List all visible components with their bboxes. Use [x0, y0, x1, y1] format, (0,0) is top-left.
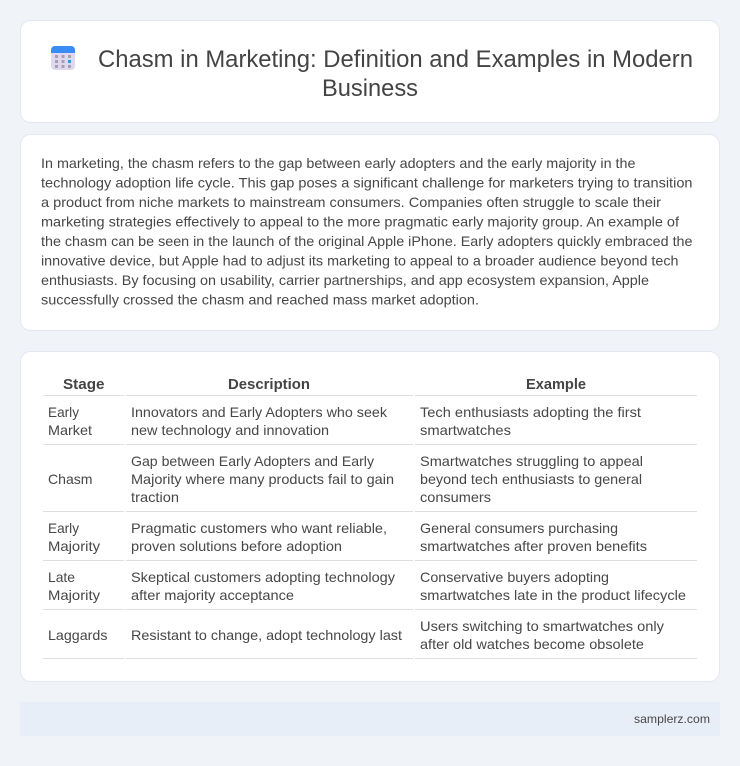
table row: Laggards: Laggards [48, 627, 108, 643]
panel: adoption stages table [20, 352, 720, 682]
table row: Chasm [48, 453, 643, 505]
table row: Late Majority [48, 569, 686, 603]
table row: Laggards: Resistant to change, adopt technology last [131, 627, 402, 643]
table header: Example [526, 376, 586, 393]
footer bar [20, 702, 720, 736]
table row: Early Majority [48, 520, 647, 554]
icon: calendar [51, 46, 75, 70]
table row: Laggards [48, 618, 664, 652]
table row: Late Majority: after majority acceptance [131, 587, 294, 603]
panel: title card [20, 20, 720, 122]
table row: Early Market: Market [48, 422, 92, 438]
table row: Late Majority: Late [48, 569, 75, 585]
table row: Chasm: Gap between Early Adopters and Early [131, 453, 374, 469]
table row: Early Majority: Pragmatic customers who want reliable, [131, 520, 387, 536]
table row: Early Majority: Majority [48, 538, 100, 554]
table row: Early Majority: General consumers purchasing [420, 520, 618, 536]
table header: Description [228, 376, 310, 393]
table row: Chasm: Chasm [48, 471, 92, 487]
text block: definition paragraph [41, 155, 693, 308]
text block: definition paragraph: technology adoption life cycle. This gap poses a significant challenge for marketers trying to transition [41, 174, 692, 190]
table row: Laggards: after old watches become obsolete [420, 636, 644, 652]
table row: Chasm: beyond tech enthusiasts to general [420, 471, 642, 487]
table row: Early Market: new technology and innovation [131, 422, 329, 438]
panel: definition text [20, 134, 720, 330]
text block: definition paragraph: innovative device, but Apple had to adjust its marketing to appeal to a broader audience beyond tech [41, 252, 678, 268]
text block: definition paragraph: In marketing, the chasm refers to the gap between early adopters and the early majority in the [41, 155, 636, 171]
table row: Early Majority: proven solutions before adoption [131, 538, 342, 554]
table row: Late Majority: Skeptical customers adopting technology [131, 569, 395, 585]
table row: Chasm: traction [131, 489, 179, 505]
table row: Early Market: Tech enthusiasts adopting the first [420, 404, 641, 420]
table row: Late Majority: Conservative buyers adopting [420, 569, 609, 585]
table row: Chasm: Majority where many products fail to gain [131, 471, 394, 487]
text block: definition paragraph: the chasm can be seen in the launch of the original Apple iPhone. Early adopters quickly embraced the [41, 233, 693, 249]
footer source text: samplerz.com [634, 712, 710, 726]
title [98, 46, 693, 102]
table row: Early Market [48, 404, 641, 438]
table row: Early Market: Innovators and Early Adopters who seek [131, 404, 388, 420]
table row: Early Market: smartwatches [420, 422, 511, 438]
table row: Late Majority: Majority [48, 587, 100, 603]
table header: Stage [63, 376, 104, 393]
table row: Early Market: Early [48, 404, 79, 420]
table row: Early Majority: Early [48, 520, 79, 536]
text block: definition paragraph: enthusiasts. By focusing on usability, carrier partnerships, and app ecosystem expansion, Apple [41, 272, 649, 288]
text block: definition paragraph: successfully crossed the chasm and reached mass market adoption. [41, 292, 479, 308]
table row: Chasm: consumers [420, 489, 491, 505]
table row: Early Majority: smartwatches after proven benefits [420, 538, 647, 554]
title: Business [322, 75, 418, 102]
table header [63, 376, 586, 393]
table row: Laggards: Users switching to smartwatches only [420, 618, 664, 634]
text block: definition paragraph: a product from niche markets to mainstream consumers. Companies often struggle to scale their [41, 194, 661, 210]
text block: definition paragraph: marketing strategies effectively to appeal to the more pragmatic early majority group. An example of [41, 214, 679, 230]
table row: Late Majority: smartwatches late in the product lifecycle [420, 587, 686, 603]
table row: Chasm: Smartwatches struggling to appeal [420, 453, 643, 469]
title: Chasm in Marketing: Definition and Examples in Modern [98, 46, 693, 73]
